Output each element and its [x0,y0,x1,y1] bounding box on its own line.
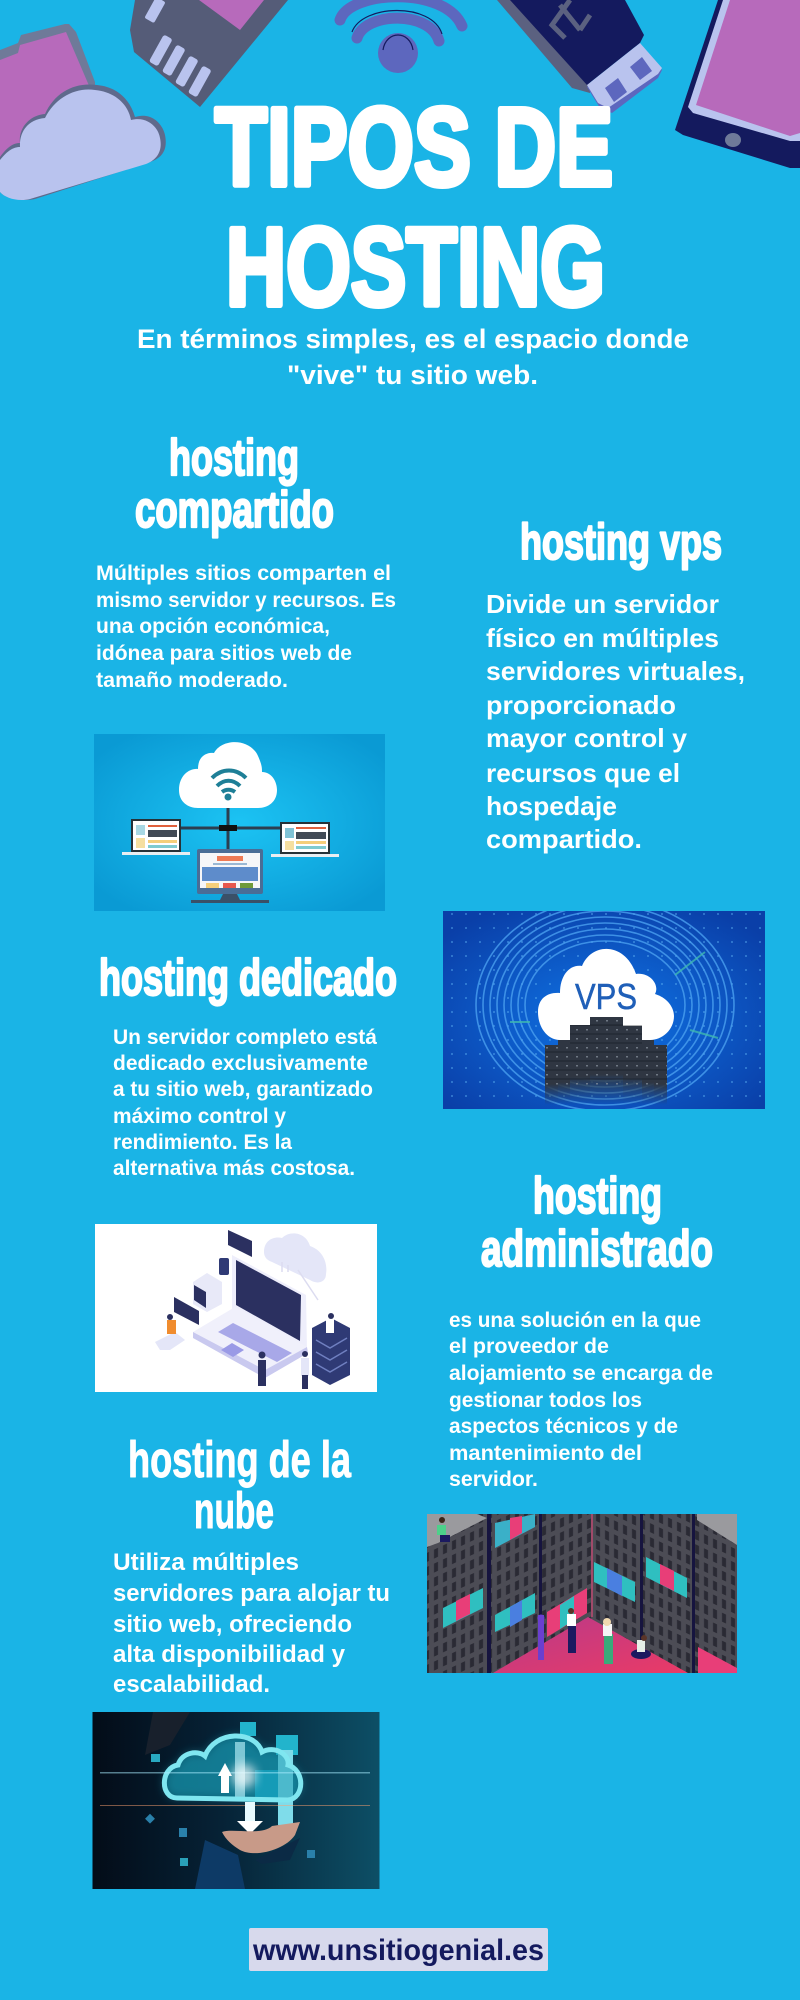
heading: hosting administrado [481,1167,713,1277]
heading: hosting compartido [135,429,334,538]
panel: hosting compartido [94,429,396,911]
text: hosting compartido description: una opción económica, [96,615,330,638]
text: hosting vps description: hospedaje [486,791,617,821]
subtitle [137,324,689,390]
text: hosting compartido description: mismo servidor y recursos. Es [96,589,396,612]
text: hosting compartido description: idónea para sitios web de [96,642,352,665]
panel: hosting de la nube [92,1431,390,1889]
text: hosting vps description: proporcionado [486,690,676,720]
text: hosting dedicado description [113,1026,377,1180]
text: hosting de la nube description: alta disponibilidad y [113,1641,346,1668]
heading: hosting de la nube: nube [194,1482,274,1539]
icon: smartphone [675,0,800,168]
text: hosting de la nube description: servidores para alojar tu [113,1580,390,1607]
heading: hosting de la nube: hosting de la [128,1431,351,1488]
icon: folder [0,24,95,180]
heading: hosting dedicado: hosting dedicado [99,949,397,1006]
text: hosting dedicado description: rendimiento. Es la [113,1131,292,1154]
text: hosting dedicado description: a tu sitio web, garantizado [113,1078,373,1101]
image: isometric laptop and server [95,1224,377,1392]
subtitle: "vive" tu sitio web. [287,360,538,390]
text: hosting administrado description: alojamiento se encarga de [449,1362,713,1385]
icon: usb drive [497,0,662,113]
heading: hosting compartido: compartido [135,481,334,538]
text: hosting vps description: compartido. [486,824,642,854]
text: hosting administrado description: gestionar todos los [449,1389,642,1412]
icon: memory card [130,0,288,107]
panel: hosting vps [443,514,765,1111]
panel: hosting administrado [427,1167,737,1673]
text: hosting dedicado description: Un servidor completo está [113,1026,377,1049]
text: hosting compartido description [96,562,396,692]
icon: cloud [0,84,166,200]
title [215,86,613,329]
footer: website url: www.unsitiogenial.es [252,1934,544,1967]
image: glowing cloud over hand [92,1712,380,1889]
text: hosting dedicado description: alternativa más costosa. [113,1157,355,1180]
heading: hosting compartido: hosting [169,429,299,486]
panel: hosting dedicado [95,949,397,1392]
text: hosting administrado description: servidor. [449,1468,538,1491]
text: hosting de la nube description [113,1549,390,1698]
heading: hosting vps: hosting vps [520,514,722,570]
text: hosting vps description: mayor control y [486,723,688,753]
subtitle: En términos simples, es el espacio donde [137,324,689,354]
image: cloud network illustration [94,734,385,911]
text: hosting vps description: servidores virtuales, [486,656,745,686]
text: hosting vps description [486,589,745,854]
heading: hosting de la nube [128,1431,351,1539]
text: hosting de la nube description: escalabilidad. [113,1671,270,1698]
text: hosting compartido description: tamaño moderado. [96,669,288,692]
image: data center racks [427,1514,737,1673]
title: TIPOS DE [215,86,613,209]
text: hosting dedicado description: máximo control y [113,1105,286,1128]
image: VPS cloud server [443,899,765,1111]
text: hosting administrado description: es una solución en la que [449,1309,701,1332]
text: hosting administrado description: aspectos técnicos y de [449,1415,678,1438]
text: hosting vps description: físico en múltiples [486,623,719,653]
text: hosting administrado description [449,1309,713,1491]
text: hosting dedicado description: dedicado exclusivamente [113,1052,368,1075]
text: hosting vps description: Divide un servidor [486,589,719,619]
heading: hosting administrado: hosting [533,1167,662,1224]
image: VPS cloud server: VPS [575,976,637,1017]
text: hosting de la nube description: sitio web, ofreciendo [113,1611,352,1638]
text: hosting vps description: recursos que el [486,758,680,788]
text: hosting compartido description: Múltiples sitios comparten el [96,562,391,585]
title: HOSTING [226,206,605,329]
text: hosting administrado description: mantenimiento del [449,1442,642,1465]
text: hosting administrado description: el proveedor de [449,1335,609,1358]
heading: hosting administrado: administrado [481,1220,713,1277]
icon: wifi [340,0,462,73]
text: hosting de la nube description: Utiliza múltiples [113,1549,299,1576]
